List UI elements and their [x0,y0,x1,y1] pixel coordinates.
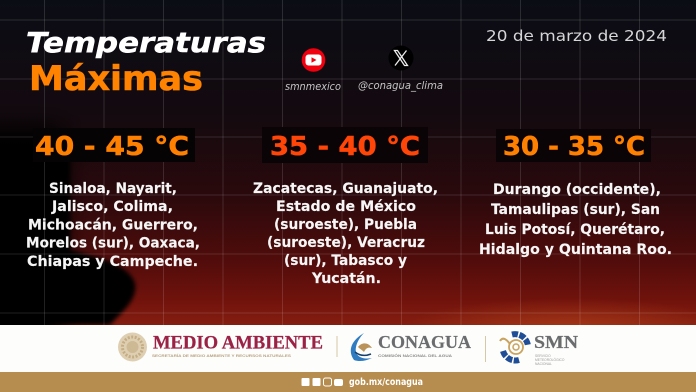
range heading 35-40: 35 - 40 °C [270,132,420,162]
logo: Conagua: COMISIÓN NACIONAL DEL AGUA [378,353,452,358]
logo: SMN: METEOROLÓGICO [535,357,565,362]
states list 30-35 [479,182,672,258]
social: X [358,46,443,92]
social: youtube [285,48,341,93]
states list 30-35: Luis Potosí, Querétaro, [485,222,665,238]
footer: logos band [0,325,696,372]
range heading 30-35: 30 - 35 °C [503,132,645,162]
states list 35-40: (suroeste), Veracruz [267,235,425,251]
title [26,26,266,99]
states list 40-45: Michoacán, Guerrero, [28,218,198,234]
title: Temperaturas [26,26,266,59]
panel: 30 - 35 °C [479,129,672,258]
icon: Conagua water swoosh [351,333,372,361]
icons: social networks [302,378,343,386]
states list 40-45 [26,181,200,270]
panel: 40 - 45 °C [26,128,200,270]
states list 35-40: Estado de México [276,199,416,215]
states list 30-35: Durango (occidente), [493,182,661,198]
states list 35-40: (sur), Tabasco y [284,253,408,269]
states list 40-45: Jalisco, Colima, [51,199,173,215]
footer: gold strip [0,372,696,392]
footer: gold strip: gob.mx/conagua [349,377,423,388]
social: youtube: smnmexico [285,81,341,93]
logo: SMN [500,332,578,366]
logo: Medio Ambiente: MEDIO AMBIENTE [153,332,323,354]
states list 40-45: Sinaloa, Nayarit, [49,181,177,197]
logo: Conagua: CONAGUA [378,332,471,352]
social: X: @conagua_clima [358,80,443,92]
icon: SMN gear and swirl [500,334,528,360]
logo: SMN: SERVICIO [535,354,551,358]
logo: Conagua [351,332,471,361]
range heading 40-45: 40 - 45 °C [35,132,189,162]
states list 40-45: Morelos (sur), Oaxaca, [26,236,200,252]
states list 40-45: Chiapas y Campeche. [27,254,198,270]
states list 30-35: Hidalgo y Quintana Roo. [479,242,672,258]
logo: SMN: NACIONAL [535,362,552,366]
states list 30-35: Tamaulipas (sur), San [491,202,660,218]
states list 35-40 [253,181,438,287]
icon: national emblem [118,332,147,362]
title: Máximas [29,59,203,99]
states list 35-40: Zacatecas, Guanajuato, [253,181,438,197]
date: 20 de marzo de 2024 [486,27,667,45]
states list 35-40: (suroeste), Puebla [274,217,417,233]
logo: Medio Ambiente [118,332,323,362]
logo: SMN: SMN [534,332,578,352]
logo: Medio Ambiente: SECRETARÍA DE MEDIO AMBIENTE Y RECURSOS NATURALES [152,353,291,358]
states list 35-40: Yucatán. [311,271,381,287]
panel: 35 - 40 °C [253,127,438,287]
